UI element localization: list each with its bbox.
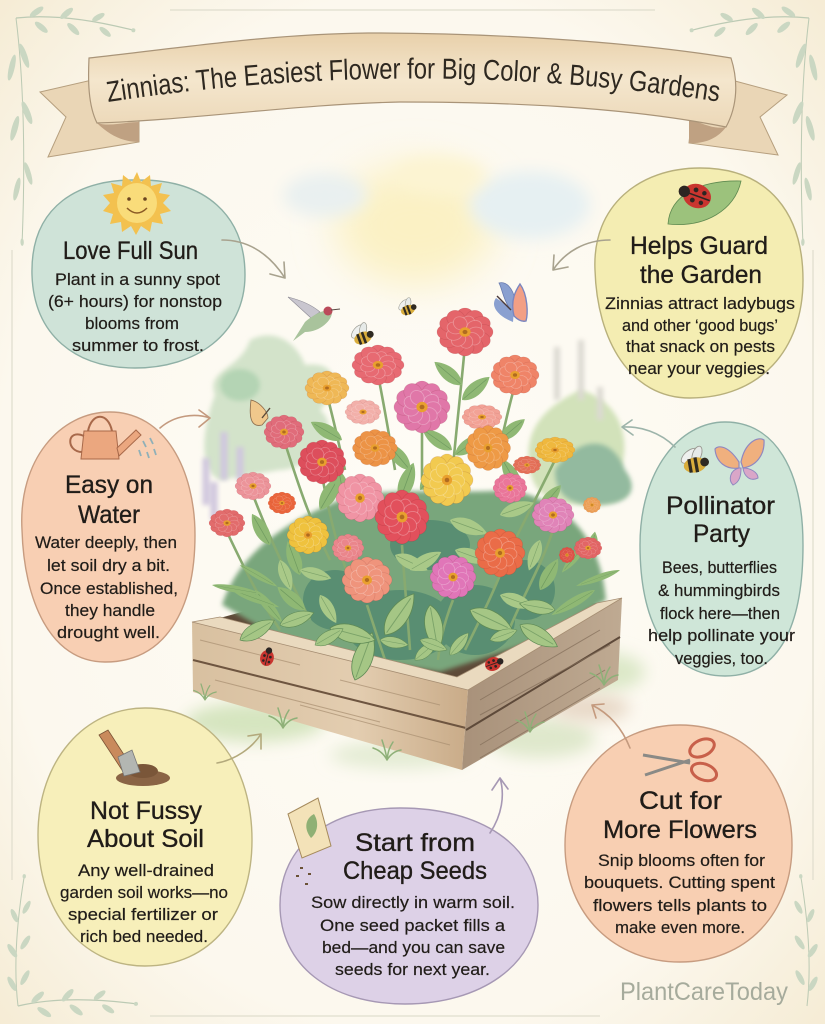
- heading: Not Fussy: [90, 797, 202, 825]
- bumblebee upper: [395, 295, 418, 318]
- body text: Plant in a sunny spot: [55, 270, 220, 289]
- raised wooden bed front: [192, 598, 622, 770]
- panel: cut for more flowers: [565, 725, 792, 962]
- ladybug on bed corner: [483, 654, 506, 673]
- grass tufts: [194, 665, 618, 760]
- icon: watering can: [70, 417, 156, 459]
- body text: veggies, too.: [675, 649, 768, 668]
- banner body: [89, 33, 736, 127]
- body text: help pollinate your: [648, 626, 795, 645]
- side face: [462, 598, 622, 770]
- icon: bee: [677, 443, 710, 475]
- heading: [343, 829, 487, 885]
- icon: butterfly: [715, 439, 764, 485]
- body text: and other ‘good bugs’: [622, 316, 778, 335]
- body text: Once established,: [40, 579, 178, 598]
- body text: make even more.: [615, 918, 745, 937]
- panel: helps guard the garden: [595, 168, 803, 398]
- body text: Bees, butterflies: [662, 558, 777, 577]
- long front face: [192, 622, 468, 770]
- body text: Snip blooms often for: [598, 851, 765, 870]
- arrow: soil: [217, 734, 261, 763]
- title banner: [39, 32, 788, 158]
- body text: [60, 861, 228, 946]
- body text: flock here—then: [660, 604, 780, 623]
- body text: [35, 533, 178, 642]
- body text: special fertilizer or: [68, 905, 218, 924]
- heading: Water: [78, 501, 140, 529]
- flower stems and leaf mass: [211, 345, 621, 672]
- heading: Pollinator: [666, 492, 775, 520]
- zinnia blooms: [209, 307, 602, 604]
- panel: start from cheap seeds: [280, 798, 538, 1004]
- icon: scissors: [643, 735, 719, 784]
- heading: Love Full Sun: [63, 237, 198, 265]
- heading: the Garden: [640, 261, 762, 289]
- bumblebee lower: [346, 319, 376, 348]
- heading: Party: [693, 520, 750, 548]
- icon: trowel and soil: [99, 730, 170, 786]
- arrow: guard: [553, 240, 610, 270]
- icon: ladybug on leaf: [668, 178, 741, 225]
- top rim: [192, 598, 622, 690]
- arrows from panels to garden: [160, 240, 675, 833]
- body text: let soil dry a bit.: [47, 556, 170, 575]
- body text: Sow directly in warm soil.: [311, 893, 515, 912]
- body text: Water deeply, then: [35, 533, 177, 552]
- body text: bouquets. Cutting spent: [584, 873, 775, 892]
- arrow: sun: [222, 240, 285, 278]
- banner right tail: [689, 81, 787, 155]
- heading: [87, 797, 204, 853]
- heading: About Soil: [87, 825, 204, 853]
- banner left tail: [40, 80, 139, 157]
- hummingbird: [288, 297, 340, 341]
- body text: One seed packet fills a: [320, 916, 506, 935]
- butterfly small left: [250, 400, 270, 425]
- heading: [666, 492, 775, 548]
- icon: sun: [103, 172, 171, 235]
- heading: More Flowers: [603, 816, 757, 844]
- heading: Cheap Seeds: [343, 857, 487, 885]
- body text: they handle: [65, 601, 155, 620]
- body text: near your veggies.: [628, 359, 770, 378]
- body text: & hummingbirds: [658, 581, 780, 600]
- title text: Zinnias: The Easiest Flower for Big Color & Busy Gardens: [106, 58, 720, 102]
- watermark: PlantCareToday: [620, 978, 788, 1006]
- plank lines: [193, 660, 466, 728]
- background garden foliage: [185, 335, 645, 769]
- body text: garden soil works—no: [60, 883, 228, 902]
- arrow: seeds: [490, 778, 508, 833]
- body text: flowers tells plants to: [593, 896, 767, 915]
- panel: pollinator party: [640, 422, 803, 676]
- arrow: water: [160, 410, 210, 428]
- banner folds: [97, 120, 726, 143]
- body text: [311, 893, 515, 979]
- body text: drought well.: [57, 623, 160, 642]
- raised bed soil: [220, 590, 597, 677]
- ladybug on wood: [258, 646, 276, 668]
- body text: that snack on pests: [626, 337, 775, 356]
- panel: love full sun: [32, 172, 245, 368]
- body text: Any well-drained: [78, 861, 214, 880]
- butterfly right: [494, 283, 527, 322]
- sky wash behind the garden: [283, 157, 590, 285]
- body text: [648, 558, 795, 668]
- heading: Cut for: [639, 787, 722, 815]
- body text: blooms from: [85, 314, 179, 333]
- body text: [48, 270, 222, 355]
- front leaves over the bed: [236, 588, 561, 683]
- body text: [584, 851, 775, 937]
- body text: Zinnias attract ladybugs: [605, 294, 795, 313]
- body text: bed—and you can save: [322, 938, 505, 957]
- heading: [630, 232, 768, 289]
- panel: easy on water: [22, 412, 195, 662]
- heading: [603, 787, 757, 844]
- icon: seed packet: [288, 798, 331, 884]
- body text: summer to frost.: [72, 336, 204, 355]
- arrow: cut: [592, 704, 630, 748]
- body text: seeds for next year.: [335, 960, 490, 979]
- heading: Start from: [355, 829, 475, 857]
- body text: (6+ hours) for nonstop: [48, 292, 222, 311]
- heading: Easy on: [65, 471, 153, 499]
- arrow: pollinator: [622, 420, 675, 447]
- body text: [605, 294, 795, 378]
- body text: rich bed needed.: [80, 927, 208, 946]
- panel: not fussy about soil: [38, 708, 252, 966]
- heading: Helps Guard: [630, 232, 768, 260]
- heading: [65, 471, 153, 529]
